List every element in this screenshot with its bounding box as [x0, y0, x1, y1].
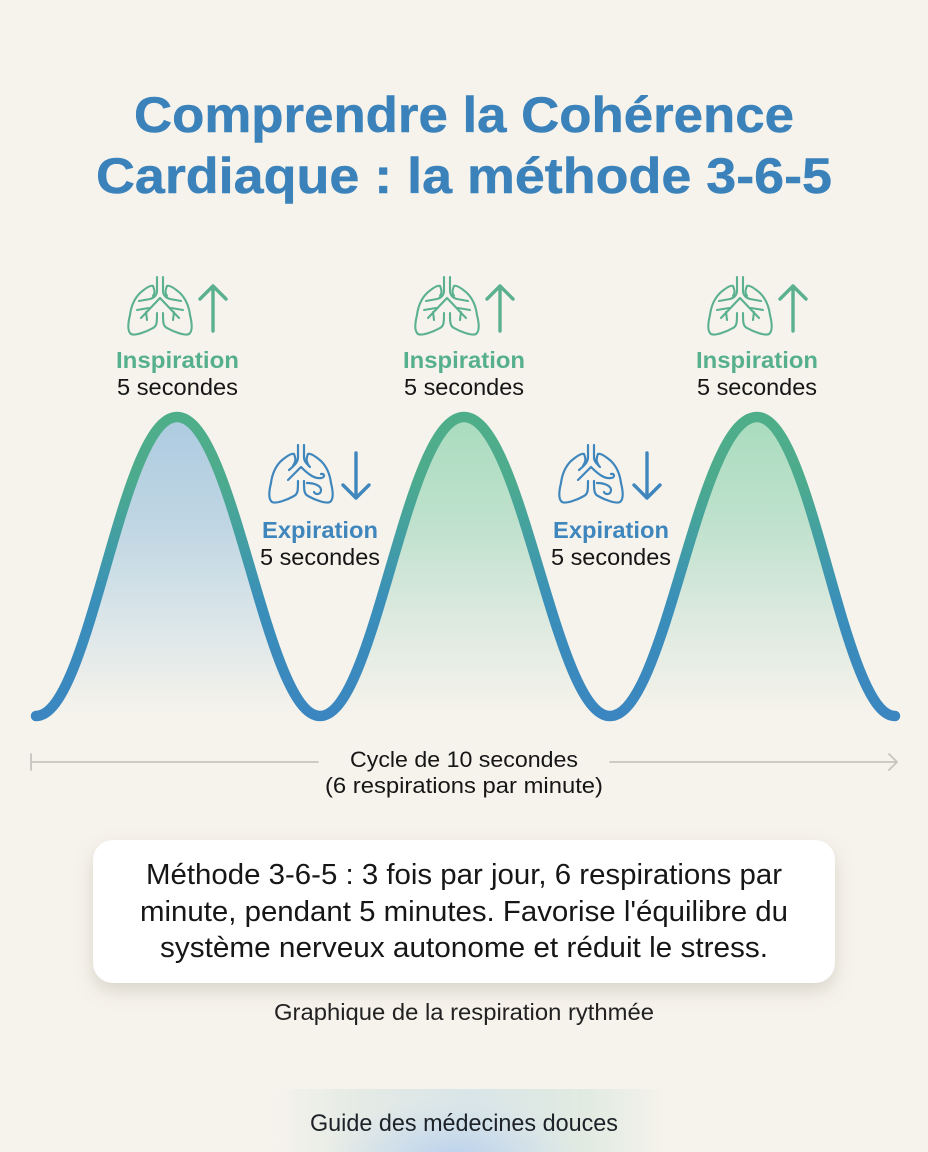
- area under first wave: [36, 417, 320, 716]
- icon: lungs inhale: [128, 277, 192, 335]
- cycle caption: (6 respirations par minute): [325, 773, 603, 798]
- expiration label 1: [260, 445, 380, 570]
- inspiration text: Inspiration: [403, 347, 525, 373]
- footer text: Guide des médecines douces: [310, 1110, 618, 1137]
- card background: [93, 840, 835, 983]
- inspiration label 2: [403, 277, 525, 400]
- icon: arrow up: [780, 286, 806, 331]
- cycle caption: Cycle de 10 secondes: [350, 747, 578, 772]
- icon: lungs inhale: [415, 277, 479, 335]
- cycle duration arrow: [31, 754, 897, 770]
- card text: Méthode 3-6-5 : 3 fois par jour, 6 respirations par: [146, 859, 782, 891]
- inspiration text: Inspiration: [696, 347, 818, 373]
- icon: arrow down: [634, 453, 660, 498]
- card text: système nerveux autonome et réduit le stress.: [160, 932, 768, 964]
- duration text: 5 secondes: [697, 374, 817, 400]
- callout card: [93, 840, 835, 983]
- icon: lungs inhale: [708, 277, 772, 335]
- inspiration text: Inspiration: [116, 347, 239, 373]
- title: Comprendre la Cohérence: [134, 87, 794, 143]
- expiration label 2: [551, 445, 671, 570]
- breathing wave chart: [36, 417, 895, 716]
- footer glow: [270, 1089, 670, 1152]
- footer: [270, 1089, 670, 1152]
- icon: lungs exhale: [269, 445, 333, 503]
- card text: [140, 859, 788, 964]
- expiration text: Expiration: [553, 517, 669, 543]
- icon: arrow up: [200, 286, 226, 331]
- inspiration label 3: [696, 277, 818, 400]
- duration text: 5 secondes: [260, 544, 380, 570]
- wave line: [36, 417, 895, 716]
- duration text: 5 secondes: [117, 374, 238, 400]
- card text: minute, pendant 5 minutes. Favorise l'équilibre du: [140, 896, 788, 928]
- icon: lungs exhale: [559, 445, 623, 503]
- area under third wave: [610, 417, 895, 716]
- icon: arrow up: [487, 286, 513, 331]
- duration text: 5 secondes: [551, 544, 671, 570]
- chart caption: Graphique de la respiration rythmée: [274, 999, 654, 1025]
- icon: arrow down: [343, 453, 369, 498]
- duration text: 5 secondes: [404, 374, 524, 400]
- title: Cardiaque : la méthode 3-6-5: [96, 148, 832, 204]
- cycle caption: [325, 747, 603, 798]
- expiration text: Expiration: [262, 517, 378, 543]
- inspiration label 1: [116, 277, 239, 400]
- title: [96, 87, 832, 204]
- area under second wave: [320, 417, 610, 716]
